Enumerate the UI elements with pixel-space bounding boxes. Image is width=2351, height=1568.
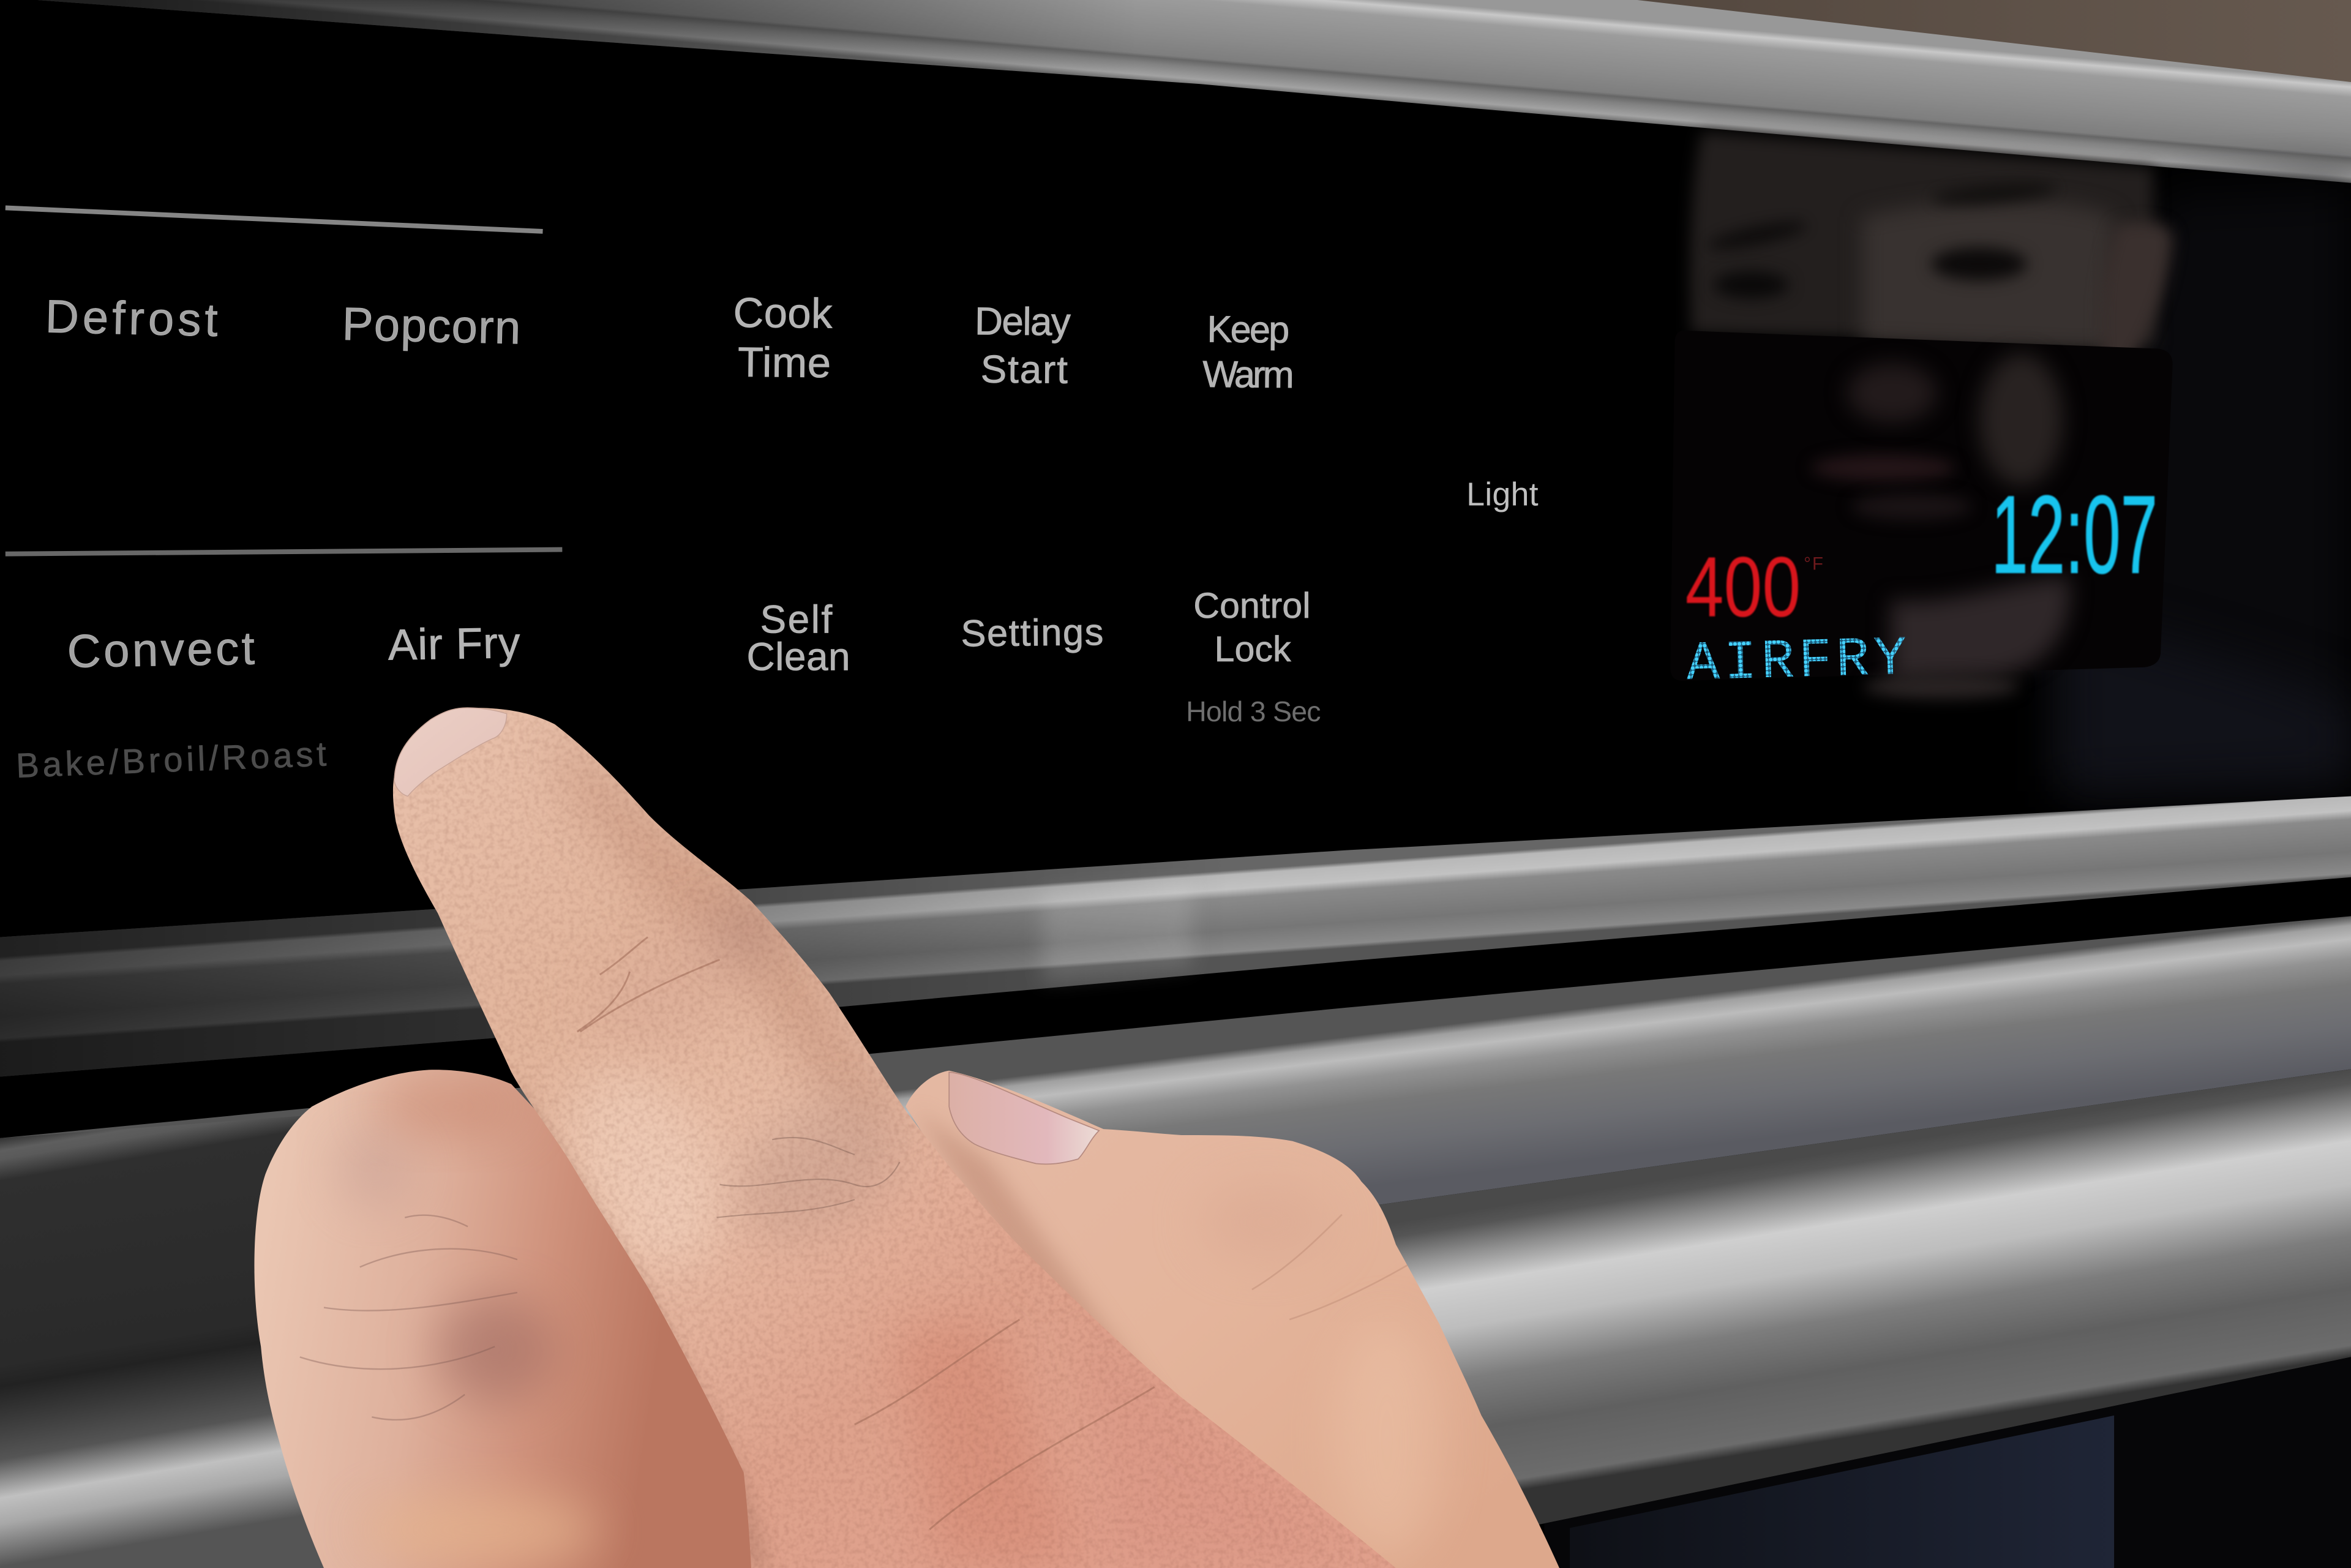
index finger	[382, 697, 1432, 1568]
lower trim band	[0, 796, 2351, 1076]
button labels: centre columns: Time	[738, 339, 831, 386]
button labels: centre columns: Lock	[1215, 629, 1291, 669]
button labels: centre columns: Start	[981, 348, 1068, 392]
display readout: AIRFRY: AIRFRY	[1685, 628, 1908, 696]
reflection of man's face in glass	[1690, 132, 2351, 792]
right fingernail	[949, 1072, 1099, 1164]
button labels: centre columns: Delay	[975, 299, 1071, 344]
display readout: temperature 400: 400	[1685, 539, 1801, 635]
left section divider lines	[6, 208, 562, 554]
button labels: left column: Convect	[67, 623, 255, 678]
button labels: left column: Air Fry	[388, 619, 521, 670]
button labels: centre columns: Light	[1466, 476, 1539, 512]
button labels: centre columns: Clean	[747, 636, 850, 679]
button labels: centre columns: Self	[760, 598, 832, 642]
display window tint	[1670, 331, 2173, 699]
right finger	[885, 1049, 1574, 1568]
button labels: centre columns: Control	[1193, 586, 1310, 626]
button labels: left column: Defrost	[45, 290, 219, 347]
button labels: left column: Bake/Broil/Roast	[15, 734, 327, 785]
wall behind oven	[1634, 0, 2351, 84]
button labels: centre columns: Keep	[1207, 308, 1290, 351]
top stainless trim	[37, 0, 2351, 183]
button labels: centre columns: Warm	[1202, 353, 1294, 396]
button labels: centre columns: Settings	[961, 611, 1104, 655]
rounded oven door handle	[0, 1069, 2351, 1568]
left finger	[254, 1070, 751, 1568]
hand pressing Air Fry	[240, 697, 1574, 1568]
left portion of handle	[0, 1109, 360, 1568]
button labels: centre columns: Cook	[733, 289, 833, 337]
dark space under handle	[1544, 1357, 2351, 1568]
button labels: left column	[15, 290, 521, 785]
button labels: centre columns	[733, 289, 1539, 727]
upper oven door handle face	[0, 916, 2351, 1387]
display readout: clock 12:07: 12:07	[1991, 473, 2158, 597]
index fingernail	[394, 708, 507, 796]
display readout: degrees F: °F	[1804, 554, 1823, 574]
button labels: left column: Popcorn	[342, 298, 521, 354]
button labels: centre columns: Hold 3 Sec	[1186, 696, 1321, 727]
